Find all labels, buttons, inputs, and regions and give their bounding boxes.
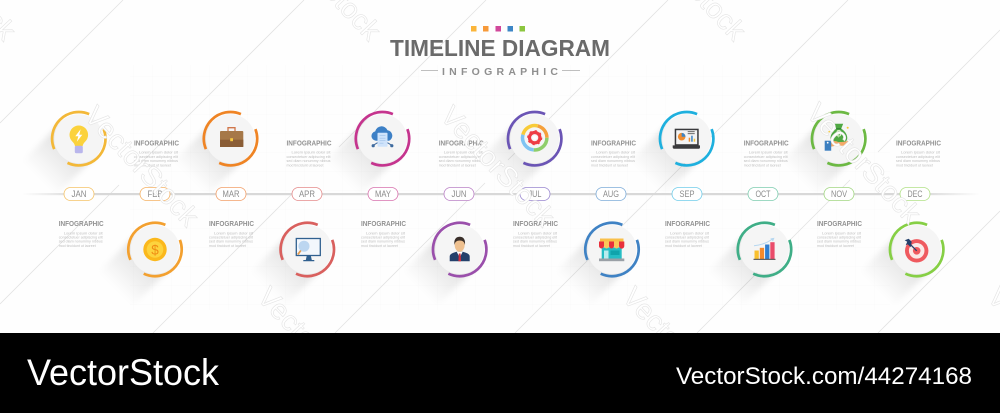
text block: February: sed diam nonummy nibbus	[134, 158, 178, 163]
month pills	[64, 188, 930, 200]
VectorStock watermark text: VectorStock	[79, 100, 206, 233]
text block: November: INFOGRAPHIC	[817, 219, 863, 228]
icon: monitor with magnifier	[296, 238, 320, 261]
text block: September	[665, 219, 711, 248]
pill: FEB: FEB	[148, 189, 162, 199]
text block: January: mod tincidunt ut laoreet	[59, 243, 97, 248]
text block: January	[59, 219, 104, 248]
text block: September: Lorem ipsum dolor sit	[670, 231, 710, 236]
text block: February: INFOGRAPHIC	[134, 138, 180, 148]
text block: July: consectetuer adipiscing elit	[513, 235, 558, 240]
icon: hand holding money bag: $	[836, 129, 841, 139]
pill: JUL: JUL	[528, 189, 542, 199]
node: August shop	[555, 223, 639, 306]
text block: June: mod tincidunt ut laoreet	[439, 162, 477, 168]
text block: February: Lorem ipsum dolor sit	[139, 150, 179, 155]
text block: February: consectetuer adipiscing elit	[134, 154, 179, 159]
text block: August: consectetuer adipiscing elit	[591, 154, 636, 159]
text block: November: sed diam nonummy nibbus	[817, 239, 861, 244]
node: March briefcase	[174, 112, 257, 195]
text block: November: consectetuer adipiscing elit	[817, 235, 862, 240]
pill: NOV: NOV	[831, 189, 847, 199]
text block: May: INFOGRAPHIC	[361, 219, 407, 228]
VectorStock watermark text: VectorStock	[435, 100, 562, 233]
text block: March: consectetuer adipiscing elit	[209, 235, 254, 240]
text block: May: sed diam nonummy nibbus	[361, 239, 405, 244]
text block: March: Lorem ipsum dolor sit	[214, 231, 254, 236]
text block: April: sed diam nonummy nibbus	[286, 158, 331, 163]
pill: FEB	[140, 188, 170, 200]
text block: October: INFOGRAPHIC	[744, 138, 789, 148]
pill: NOV	[824, 188, 854, 200]
text block: December: Lorem ipsum dolor sit	[901, 150, 941, 155]
text block: August: sed diam nonummy nibbus	[591, 158, 635, 163]
text block: July: INFOGRAPHIC	[513, 219, 559, 228]
icon: lightbulb	[70, 126, 88, 153]
text block: May	[361, 219, 407, 248]
pill: MAY: MAY	[375, 189, 391, 199]
text block: July: sed diam nonummy nibbus	[513, 239, 557, 244]
colour squares	[471, 26, 525, 32]
text block: January: INFOGRAPHIC	[59, 219, 104, 228]
text block: March: sed diam nonummy nibbus	[209, 239, 253, 244]
text block: February	[134, 138, 180, 168]
text block: June: INFOGRAPHIC	[439, 138, 484, 148]
text block: March: mod tincidunt ut laoreet	[209, 243, 247, 248]
footer logo: VectorStock	[27, 352, 219, 393]
text block: November: mod tincidunt ut laoreet	[817, 243, 855, 248]
text block: October: consectetuer adipiscing elit	[744, 154, 789, 159]
text block: October: Lorem ipsum dolor sit	[749, 150, 789, 155]
pill: DEC	[900, 188, 930, 200]
text block: March: INFOGRAPHIC	[209, 219, 255, 228]
text block: June: consectetuer adipiscing elit	[439, 154, 484, 159]
text block: October	[744, 138, 789, 168]
text block: June: Lorem ipsum dolor sit	[444, 150, 484, 155]
node: January lightbulb	[22, 112, 105, 195]
text block: September: consectetuer adipiscing elit	[665, 235, 710, 240]
text block: January: Lorem ipsum dolor sit	[64, 231, 104, 236]
node: December target	[860, 223, 943, 306]
icon: dart target	[905, 239, 928, 262]
text block: December: consectetuer adipiscing elit	[896, 154, 941, 159]
text block: August	[591, 138, 637, 168]
pill: SEP	[672, 188, 702, 200]
title: TIMELINE DIAGRAM	[390, 35, 610, 61]
VectorStock watermark text: VectorStock	[801, 97, 928, 230]
pill: OCT	[748, 188, 778, 200]
text block: April: Lorem ipsum dolor sit	[292, 150, 331, 155]
icon: storefront	[599, 238, 624, 261]
pill: DEC: DEC	[908, 189, 923, 199]
node: June businessman	[403, 223, 486, 306]
pill: JUN: JUN	[452, 189, 466, 199]
icon: dollar coin: $	[151, 242, 159, 257]
text block: November	[817, 219, 863, 248]
pill: MAR	[216, 188, 246, 200]
text block: February: mod tincidunt ut laoreet	[134, 162, 172, 168]
pill: SEP: SEP	[680, 189, 694, 199]
VectorStock watermark text: VectorStock	[252, 281, 379, 413]
node: July gear	[478, 112, 561, 195]
pill: MAY	[368, 188, 398, 200]
node: November money bag	[782, 112, 865, 195]
timeline axis	[22, 193, 980, 195]
pill: AUG: AUG	[603, 189, 619, 199]
icon: briefcase	[220, 128, 243, 147]
text block: May: Lorem ipsum dolor sit	[366, 231, 406, 236]
text block: January: consectetuer adipiscing elit	[59, 235, 104, 240]
pill: JUN	[444, 188, 474, 200]
text block: June: sed diam nonummy nibbus	[439, 158, 483, 163]
node: February coin	[98, 223, 182, 306]
text block: August: Lorem ipsum dolor sit	[596, 150, 636, 155]
icon: laptop with charts	[673, 129, 700, 149]
pill: MAR: MAR	[222, 189, 240, 199]
pill: AUG	[596, 188, 626, 200]
pill: APR	[292, 188, 322, 200]
text block: November: Lorem ipsum dolor sit	[822, 231, 862, 236]
VectorStock watermark text: VectorStock	[617, 281, 744, 413]
text block: October: mod tincidunt ut laoreet	[744, 162, 782, 168]
text block: October: sed diam nonummy nibbus	[744, 158, 788, 163]
text block: January: sed diam nonummy nibbus	[59, 239, 103, 244]
footer image URL: VectorStock.com/44274168	[676, 363, 972, 390]
icon: businessman	[450, 237, 470, 261]
footer bar	[0, 333, 1000, 413]
pill: JAN	[64, 188, 94, 200]
text block: December: mod tincidunt ut laoreet	[896, 162, 934, 168]
icon: gear in ring	[523, 126, 547, 150]
pill: JUL	[520, 188, 550, 200]
subtitle: INFOGRAPHIC	[442, 66, 558, 78]
pill: OCT: OCT	[756, 189, 771, 199]
text block: December	[896, 138, 942, 168]
text block: June	[439, 138, 484, 168]
icon: cloud with document	[371, 126, 393, 147]
node: October bar chart	[708, 223, 791, 306]
icon: rising bar chart	[754, 238, 776, 260]
text block: March	[209, 219, 255, 248]
text block: May: consectetuer adipiscing elit	[361, 235, 406, 240]
node: May cloud	[326, 112, 409, 195]
node: April monitor	[251, 223, 334, 306]
text block: May: mod tincidunt ut laoreet	[361, 243, 399, 248]
text block: July	[513, 219, 559, 248]
title block	[390, 26, 610, 78]
text block: December: sed diam nonummy nibbus	[896, 158, 940, 163]
pill: JAN: JAN	[72, 189, 86, 199]
text block: April: INFOGRAPHIC	[286, 138, 332, 148]
text block: April: consectetuer adipiscing elit	[286, 154, 331, 159]
text block: September: INFOGRAPHIC	[665, 219, 711, 228]
text block: July: mod tincidunt ut laoreet	[513, 243, 551, 248]
text block: December: INFOGRAPHIC	[896, 138, 942, 148]
text block: September: sed diam nonummy nibbus	[665, 239, 709, 244]
text block: July: Lorem ipsum dolor sit	[518, 231, 558, 236]
node: September laptop	[630, 112, 713, 195]
text block: April: mod tincidunt ut laoreet	[286, 162, 324, 168]
text block: August: mod tincidunt ut laoreet	[591, 162, 629, 168]
text block: April	[286, 138, 332, 168]
pill: APR: APR	[299, 189, 315, 199]
text block: August: INFOGRAPHIC	[591, 138, 637, 148]
text block: September: mod tincidunt ut laoreet	[665, 243, 703, 248]
